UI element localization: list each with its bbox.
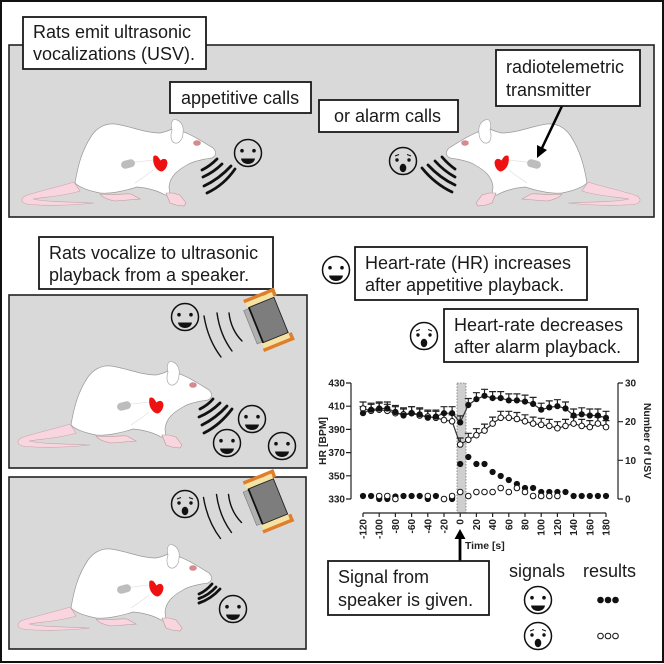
left axis: 370 <box>328 448 345 459</box>
signal band <box>457 383 466 513</box>
icon: happy face at speaker <box>172 304 198 330</box>
label: appetitive calls: appetitive calls <box>181 88 299 108</box>
markers: USV appetitive <box>363 457 606 499</box>
callout: HR increases: Heart-rate (HR) increases <box>365 253 571 273</box>
heading: playback: Rats vocalize to ultrasonic <box>49 243 258 263</box>
icon: happy face response 3 <box>268 432 296 460</box>
label: radiotelemetric transmitter <box>496 50 640 106</box>
panel: appetitive playback <box>9 288 307 468</box>
time axis: 120 <box>553 519 564 536</box>
callout: HR increases <box>355 247 587 300</box>
left axis: 430 <box>328 378 345 390</box>
sound waves: few calls <box>199 584 220 603</box>
icon: shocked face at speaker <box>172 490 198 518</box>
rat: appetitive playback <box>18 361 212 448</box>
icon: happy face response <box>220 596 246 622</box>
time axis: Time [s] <box>465 541 505 552</box>
left axis: 330 <box>328 494 345 506</box>
right axis: 30 <box>625 378 637 390</box>
time axis: 0 <box>456 519 467 525</box>
label: radiotelemetric transmitter: transmitter <box>506 80 591 100</box>
right axis: 10 <box>625 456 637 467</box>
time axis: 80 <box>520 519 532 530</box>
icon: happy face <box>234 140 262 166</box>
left axis: 350 <box>328 471 345 482</box>
sound waves: rat vocalizing <box>199 399 232 433</box>
panel: alarm playback <box>9 469 306 649</box>
title box <box>23 17 206 69</box>
time axis: 140 <box>569 519 580 536</box>
callout: HR decreases <box>444 309 638 362</box>
panel: rats emit USV <box>9 45 654 217</box>
time axis <box>358 513 612 552</box>
callout: signal from speaker: speaker is given. <box>338 590 473 610</box>
icon: happy face response 1 <box>238 406 266 432</box>
series: HR alarm (open) <box>363 408 606 444</box>
icon: happy face HR <box>322 256 350 284</box>
label: or alarm calls <box>319 100 458 132</box>
markers: HR appetitive <box>363 396 606 422</box>
time axis: -20 <box>440 519 450 533</box>
arrow to transmitter <box>537 106 562 158</box>
legend icon: happy <box>524 586 552 614</box>
time axis: -60 <box>407 519 418 533</box>
time axis: 100 <box>537 519 548 536</box>
markers: USV alarm <box>379 488 557 499</box>
legend heading: signals: signals <box>509 561 565 581</box>
label: appetitive calls <box>170 82 311 113</box>
callout: HR increases: after appetitive playback. <box>365 275 564 295</box>
time axis: 180 <box>602 519 612 536</box>
chart: heart rate and USV <box>318 378 652 552</box>
sound waves: appetitive <box>202 159 235 193</box>
time axis: 40 <box>488 519 499 530</box>
callout: signal from speaker: Signal from <box>338 567 429 587</box>
title box: Rats emit ultrasonic <box>33 22 191 42</box>
legend heading: results: results <box>583 561 636 581</box>
callout: signal from speaker <box>328 561 489 615</box>
left axis <box>318 378 351 506</box>
icon: happy face response 2 <box>214 430 240 456</box>
title box: vocalizations (USV). <box>33 44 195 64</box>
speaker with sound arcs <box>204 288 295 357</box>
arrow: signal onset <box>454 529 466 562</box>
icon: shocked face <box>390 148 416 174</box>
heading: playback <box>39 237 273 289</box>
series: HR appetitive (filled) <box>363 396 606 422</box>
label: or alarm calls: or alarm calls <box>334 106 441 126</box>
right axis: Number of USV <box>641 403 652 479</box>
right axis: 20 <box>625 417 637 428</box>
left axis: 390 <box>328 425 345 436</box>
legend icon: shocked <box>524 622 552 650</box>
heading: playback: playback from a speaker. <box>49 265 249 285</box>
time axis: 20 <box>472 519 483 530</box>
rat: left, appetitive <box>22 119 216 206</box>
time axis: -120 <box>358 519 370 539</box>
right axis: 0 <box>625 494 631 506</box>
left axis: 410 <box>328 402 345 413</box>
time axis: 160 <box>585 519 596 536</box>
time axis: 60 <box>504 519 515 530</box>
rat: alarm playback <box>18 544 212 631</box>
time axis: -40 <box>423 519 434 533</box>
right axis <box>618 378 652 506</box>
left axis: HR [BPM] <box>318 417 329 465</box>
markers: HR alarm <box>363 408 606 444</box>
icon: shocked face HR <box>410 322 438 350</box>
time axis: -80 <box>391 519 402 533</box>
sound waves: alarm <box>422 157 455 192</box>
speaker with sound arcs <box>204 469 294 538</box>
legend dots: open <box>598 633 618 639</box>
callout: HR decreases: after alarm playback. <box>454 337 621 357</box>
rat: right, alarm <box>446 119 640 206</box>
legend <box>509 561 636 650</box>
time axis: -100 <box>375 519 386 539</box>
label: radiotelemetric transmitter: radiotelemetric <box>506 57 624 77</box>
callout: HR decreases: Heart-rate decreases <box>454 315 623 335</box>
legend dots: filled <box>597 597 619 603</box>
